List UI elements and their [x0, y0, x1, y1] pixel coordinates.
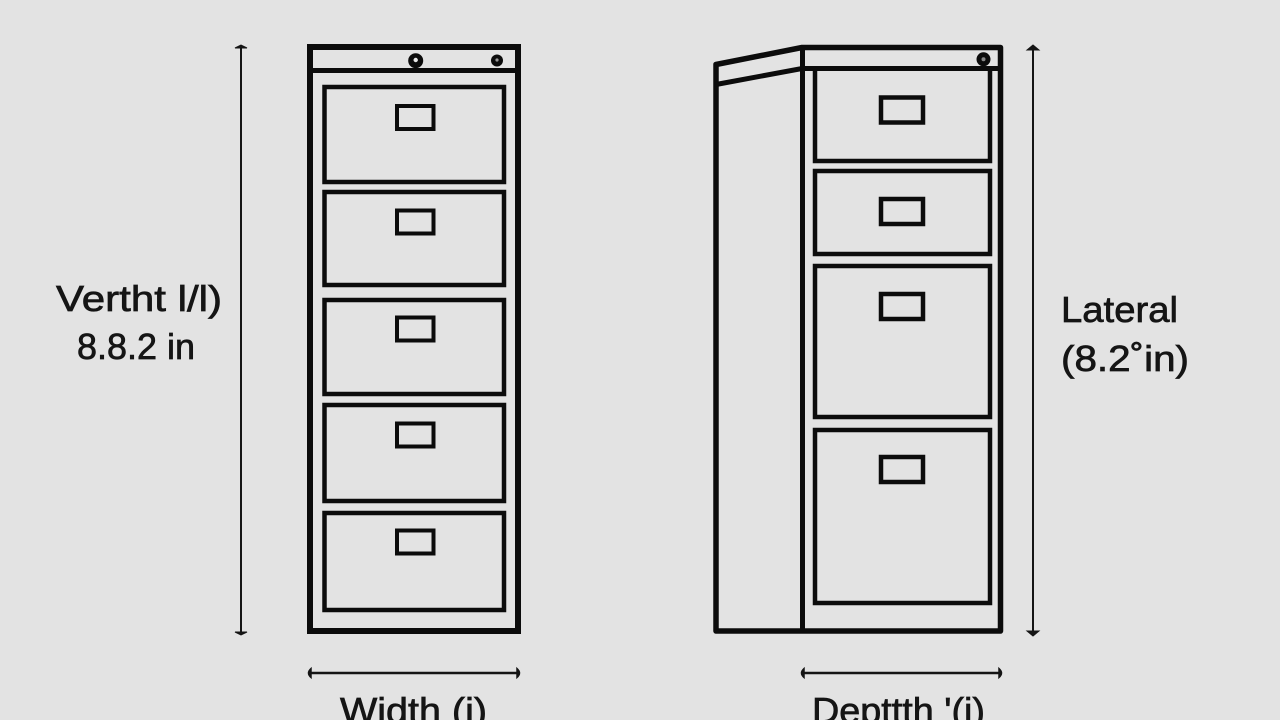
corner edge: [800, 47, 805, 631]
drawer 4: [324, 405, 504, 501]
drawer 1: [324, 87, 504, 182]
lock: [976, 52, 990, 66]
drawer 2: [815, 171, 990, 254]
drawer 1: [815, 69, 990, 161]
arrow: height right: [1027, 45, 1039, 636]
arrow: depth: [802, 668, 1002, 678]
drawer 3: [324, 300, 504, 394]
right cabinet: angled view: [716, 47, 1000, 631]
label: vertical: 8.8.2 in: [77, 326, 195, 367]
top band: [310, 68, 518, 73]
label: lateral: (8.2˚in): [1061, 338, 1189, 379]
drawer 2: [324, 192, 504, 285]
cabinet outline: [716, 48, 1000, 631]
left cabinet: front view: [310, 47, 518, 631]
arrow: width: [308, 668, 520, 678]
label: vertical: Vertht l/l): [56, 278, 222, 319]
drawer 3: [815, 266, 990, 417]
lock: small: [491, 54, 503, 66]
drawer 4: [815, 430, 990, 603]
top band: [716, 68, 1000, 84]
label: lateral: Lateral: [1061, 289, 1178, 330]
label: vertical: [56, 278, 222, 367]
label: lateral: [1061, 289, 1189, 379]
drawer 5: [324, 513, 504, 610]
lock: large: [408, 53, 423, 68]
arrow: height left: [235, 45, 247, 635]
cabinet body: [310, 47, 518, 631]
